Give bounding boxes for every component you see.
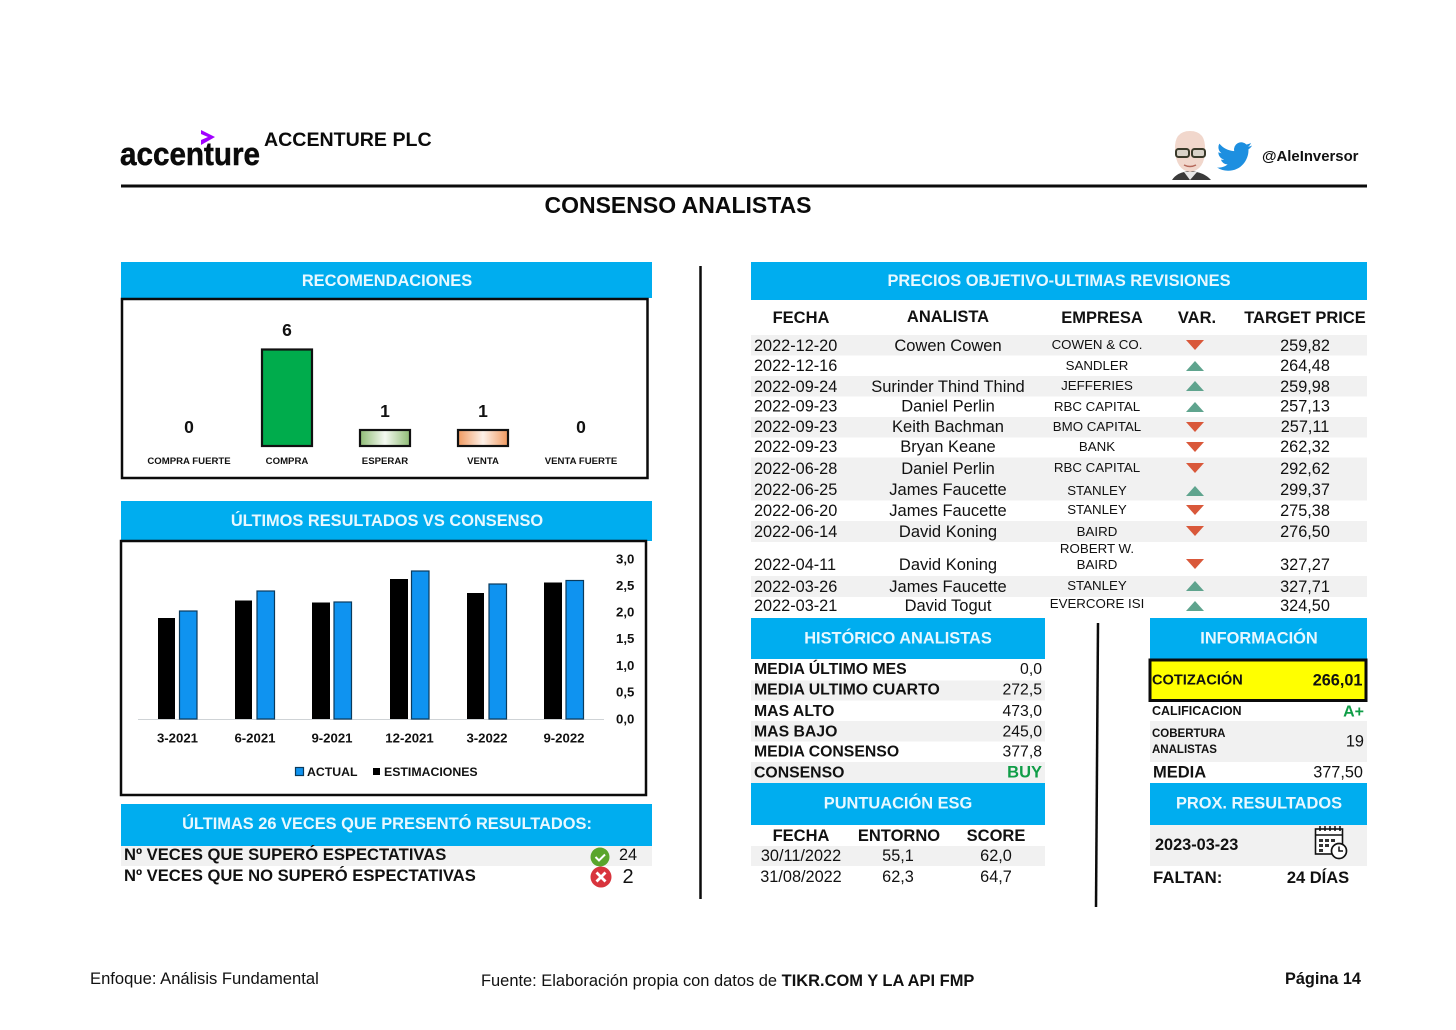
bar chart: recomendaciones: COMPRA (266, 456, 308, 467)
row: consenso: CONSENSO (754, 764, 844, 782)
row 2022-06-28: Daniel Perlin (901, 460, 995, 478)
row: mas alto: 473,0 (1002, 703, 1042, 720)
row 2022-06-25: James Faucette (889, 481, 1007, 499)
bar chart: actual vs estimaciones (121, 541, 646, 795)
bar chart: actual vs estimaciones: 3-2021 (157, 730, 198, 746)
esg row 2 (760, 868, 1012, 886)
bar chart: recomendaciones: 0 (576, 417, 586, 437)
esg row 1: 62,0 (980, 847, 1012, 865)
cotización box: 266,01 (1313, 672, 1362, 690)
row: veces superó (121, 845, 652, 866)
row 2022-12-20: 2022-12-20 (754, 337, 837, 355)
bar chart: recomendaciones: COMPRA FUERTE (147, 456, 231, 467)
row 2022-12-16 (754, 357, 1330, 375)
icon: calendar (1316, 826, 1346, 858)
row 2022-06-28 (754, 460, 1330, 478)
row: media último mes (754, 659, 1042, 678)
heading: histórico analistas (751, 618, 1045, 659)
row: veces no superó: Nº VECES QUE NO SUPERÓ ESPECTATIVAS (124, 866, 476, 885)
heading: información: INFORMACIÓN (1200, 628, 1318, 648)
bar chart: actual vs estimaciones: 9-2021 (311, 730, 353, 746)
days left (1153, 868, 1349, 887)
row 2022-09-23 Bachman: 257,11 (1281, 418, 1329, 436)
bar chart: recomendaciones: VENTA (467, 456, 499, 467)
row: media consenso: MEDIA CONSENSO (754, 744, 899, 760)
bar chart: actual vs estimaciones: 2,0 (616, 604, 634, 620)
heading: recomendaciones: RECOMENDACIONES (302, 272, 472, 290)
row: media consenso: 377,8 (1002, 744, 1042, 760)
row 2022-03-26: 2022-03-26 (754, 578, 837, 596)
esg table header: ENTORNO (858, 827, 940, 845)
bar chart: actual vs estimaciones: 12-2021 (385, 730, 434, 746)
row 2022-03-26: James Faucette (889, 578, 1007, 596)
row 2022-12-20: COWEN & CO. (1052, 337, 1142, 352)
footer: enfoque: Enfoque: Análisis Fundamental (90, 969, 319, 988)
panel: últimas 26 veces (121, 804, 652, 888)
cotización box (1150, 660, 1366, 700)
heading: histórico analistas: HISTÓRICO ANALISTAS (804, 628, 992, 648)
row: consenso (754, 764, 1042, 782)
heading: precios objetivo: PRECIOS OBJETIVO-ULTIMAS REVISIONES (887, 272, 1231, 290)
row 2022-06-25: 2022-06-25 (754, 481, 837, 499)
row 2022-09-24: JEFFERIES (1061, 378, 1133, 393)
bar chart: actual vs estimaciones: 3,0 (616, 552, 634, 566)
row: mas bajo (754, 724, 1042, 740)
row: media: MEDIA (1153, 764, 1206, 782)
row 2022-09-23 Bachman: 2022-09-23 (754, 418, 837, 436)
bar chart: recomendaciones: VENTA FUERTE (545, 456, 618, 467)
row 2022-09-24: Surinder Thind Thind (871, 378, 1025, 396)
row: media último cuarto: 272,5 (1002, 682, 1042, 698)
row 2022-04-11: David Koning (899, 556, 997, 574)
row 2022-03-26 (754, 578, 1330, 596)
bar chart: recomendaciones: 0 (184, 417, 194, 437)
row 2022-12-16: 2022-12-16 (754, 357, 837, 375)
table header (773, 308, 1366, 327)
esg row 2: 64,7 (980, 868, 1012, 886)
row: consenso: BUY (1007, 764, 1042, 782)
row 2022-03-21: EVERCORE ISI (1050, 596, 1144, 611)
esg row 1: 55,1 (882, 847, 914, 865)
row 2022-09-23 Perlin: 257,13 (1280, 398, 1330, 416)
heading: información (1150, 618, 1367, 659)
table header: TARGET PRICE (1244, 309, 1366, 327)
row 2022-12-16: 264,48 (1280, 357, 1330, 375)
table header: VAR. (1178, 309, 1216, 327)
row 2022-06-25: 299,37 (1280, 481, 1330, 499)
heading: recomendaciones (121, 262, 652, 298)
row 2022-09-23 Perlin (754, 398, 1330, 416)
row: cobertura analistas: COBERTURA (1152, 728, 1225, 740)
row: calificación: CALIFICACION (1152, 704, 1242, 718)
icon: author avatar (1172, 131, 1211, 180)
panel: puntuación esg (751, 783, 1045, 886)
row 2022-06-20: 2022-06-20 (754, 502, 837, 520)
table header: EMPRESA (1061, 309, 1143, 327)
row 2022-09-23 Perlin: RBC CAPITAL (1054, 399, 1140, 414)
row: media último cuarto (754, 682, 1042, 698)
row 2022-09-23 Bachman: BMO CAPITAL (1053, 419, 1141, 434)
footer: fuente: Fuente: Elaboración propia con datos de TIKR.COM Y LA API FMP (481, 972, 974, 990)
row 2022-09-23 Bachman: Keith Bachman (892, 418, 1004, 436)
heading: puntuación esg (751, 783, 1045, 825)
footer: página: Página 14 (1285, 970, 1361, 988)
row 2022-09-24: 259,98 (1280, 378, 1330, 396)
row 2022-04-11: ROBERT W. (1060, 541, 1134, 556)
row 2022-04-11: BAIRD (1077, 557, 1117, 572)
row: cobertura analistas (1150, 721, 1367, 762)
row: cobertura analistas: ANALISTAS (1152, 744, 1217, 756)
row 2022-12-20: 259,82 (1280, 337, 1330, 355)
esg table header: FECHA (773, 827, 829, 845)
row: calificación (1152, 704, 1364, 720)
row 2022-09-23 Perlin: Daniel Perlin (901, 398, 995, 416)
row 2022-06-14 (754, 523, 1330, 541)
row 2022-03-21: 2022-03-21 (754, 597, 837, 615)
esg table header (773, 827, 1025, 845)
row 2022-09-23 Keane (754, 438, 1330, 456)
bar chart: actual vs estimaciones: 3-2022 (466, 730, 508, 746)
panel: próximos resultados (1150, 783, 1367, 887)
row 2022-06-14: 276,50 (1280, 523, 1330, 541)
row 2022-12-20: Cowen Cowen (894, 337, 1002, 355)
chart legend: ACTUAL (307, 765, 358, 779)
row: media último mes: 0,0 (1020, 661, 1042, 678)
heading: últimas 26 veces (121, 804, 652, 846)
page title: CONSENSO ANALISTAS (544, 192, 812, 218)
esg row 1 (761, 847, 1012, 865)
row 2022-06-14: BAIRD (1077, 524, 1117, 539)
heading: puntuación esg: PUNTUACIÓN ESG (824, 794, 972, 812)
panel: precios objetivo (751, 262, 1367, 615)
row 2022-04-11 (754, 541, 1330, 574)
row: veces no superó (124, 866, 634, 888)
cotización box: COTIZACIÓN (1152, 670, 1243, 688)
row: mas bajo: MAS BAJO (754, 724, 837, 740)
panel: información (1150, 618, 1367, 782)
heading: precios objetivo (751, 262, 1367, 300)
bar chart: actual vs estimaciones: 9-2022 (543, 730, 585, 746)
bar chart: actual vs estimaciones: 1,0 (616, 658, 634, 673)
panel: últimos resultados vs consenso (121, 501, 652, 795)
row 2022-06-20: STANLEY (1067, 502, 1127, 517)
row: mas alto (754, 703, 1042, 720)
panel: recomendaciones (121, 262, 652, 478)
heading: prox resultados: PROX. RESULTADOS (1176, 794, 1342, 812)
row 2022-06-14: 2022-06-14 (754, 523, 837, 541)
row 2022-03-21: 324,50 (1280, 597, 1330, 615)
row: media: 377,50 (1313, 764, 1363, 782)
days left: 24 DÍAS (1287, 868, 1349, 887)
row 2022-03-21 (754, 596, 1330, 615)
next date: 2023-03-23 (1155, 836, 1238, 854)
esg row 2: 31/08/2022 (760, 868, 842, 886)
row 2022-09-23 Keane: Bryan Keane (900, 438, 996, 456)
row: media (1153, 764, 1363, 782)
row 2022-09-23 Keane: BANK (1079, 439, 1115, 454)
author handle: @AleInversor (1262, 149, 1359, 165)
row 2022-09-23 Keane: 262,32 (1280, 438, 1330, 456)
row: media último mes: MEDIA ÚLTIMO MES (754, 659, 907, 678)
panel: histórico analistas (751, 618, 1045, 783)
bar chart: actual vs estimaciones: 0,0 (616, 712, 634, 726)
row: mas bajo: 245,0 (1002, 724, 1042, 740)
bar chart: actual vs estimaciones: 1,5 (616, 631, 634, 646)
chart legend (296, 765, 478, 779)
bar chart: actual vs estimaciones: 6-2021 (234, 730, 276, 746)
row: veces no superó: 2 (622, 866, 634, 888)
table header: ANALISTA (907, 308, 989, 326)
row: media consenso (754, 744, 1042, 760)
table header: FECHA (773, 309, 829, 327)
row 2022-12-16: SANDLER (1066, 358, 1128, 373)
bar chart: recomendaciones: 1 (478, 401, 488, 421)
row 2022-06-25: STANLEY (1067, 483, 1127, 498)
row 2022-04-11: 2022-04-11 (754, 556, 836, 574)
heading: últimos resultados: ÚLTIMOS RESULTADOS VS CONSENSO (231, 511, 543, 530)
bar chart: recomendaciones: 6 (282, 320, 292, 340)
icon: twitter bird (1217, 142, 1252, 171)
logo: accenture: accenture (120, 136, 260, 172)
row: media último cuarto: MEDIA ULTIMO CUARTO (754, 682, 940, 698)
esg table header: SCORE (967, 827, 1025, 845)
row 2022-03-26: 327,71 (1280, 578, 1330, 596)
row 2022-09-24: 2022-09-24 (754, 378, 837, 396)
days left: FALTAN: (1153, 868, 1222, 887)
heading: últimas 26 veces: ÚLTIMAS 26 VECES QUE PRESENTÓ RESULTADOS: (182, 814, 592, 833)
row: veces superó: Nº VECES QUE SUPERÓ ESPECTATIVAS (124, 845, 446, 864)
row 2022-06-25 (754, 481, 1330, 499)
chart legend: ESTIMACIONES (384, 765, 478, 779)
bar chart: recomendaciones (122, 299, 648, 478)
row 2022-06-28: 292,62 (1280, 460, 1330, 478)
bar chart: actual vs estimaciones: 2,5 (616, 578, 634, 593)
bar chart: actual vs estimaciones: 0,5 (616, 684, 634, 700)
row 2022-09-23 Bachman (754, 418, 1329, 436)
heading: últimos resultados (121, 501, 652, 541)
row: mas alto: MAS ALTO (754, 703, 834, 720)
heading: prox resultados (1150, 783, 1367, 825)
row 2022-09-23 Perlin: 2022-09-23 (754, 398, 837, 416)
row: cobertura analistas: 19 (1346, 732, 1364, 750)
row 2022-06-28: 2022-06-28 (754, 460, 837, 478)
bar chart: recomendaciones: 1 (380, 401, 390, 421)
row 2022-06-28: RBC CAPITAL (1054, 460, 1140, 475)
row 2022-06-20 (754, 502, 1330, 520)
row: calificación: A+ (1343, 704, 1364, 720)
esg row 1: 30/11/2022 (761, 847, 841, 865)
row 2022-04-11: 327,27 (1280, 556, 1330, 574)
row 2022-03-26: STANLEY (1067, 578, 1127, 593)
esg row 2: 62,3 (882, 868, 914, 886)
row 2022-03-21: David Togut (905, 597, 992, 615)
row 2022-06-20: James Faucette (889, 502, 1007, 520)
bar chart: recomendaciones: ESPERAR (362, 456, 408, 467)
row 2022-09-23 Keane: 2022-09-23 (754, 438, 837, 456)
row: veces superó: 24 (619, 846, 637, 864)
company name: ACCENTURE PLC (264, 129, 432, 151)
row 2022-06-20: 275,38 (1280, 502, 1330, 520)
row 2022-06-14: David Koning (899, 523, 997, 541)
row 2022-09-24 (754, 378, 1330, 396)
row 2022-12-20 (754, 337, 1330, 355)
